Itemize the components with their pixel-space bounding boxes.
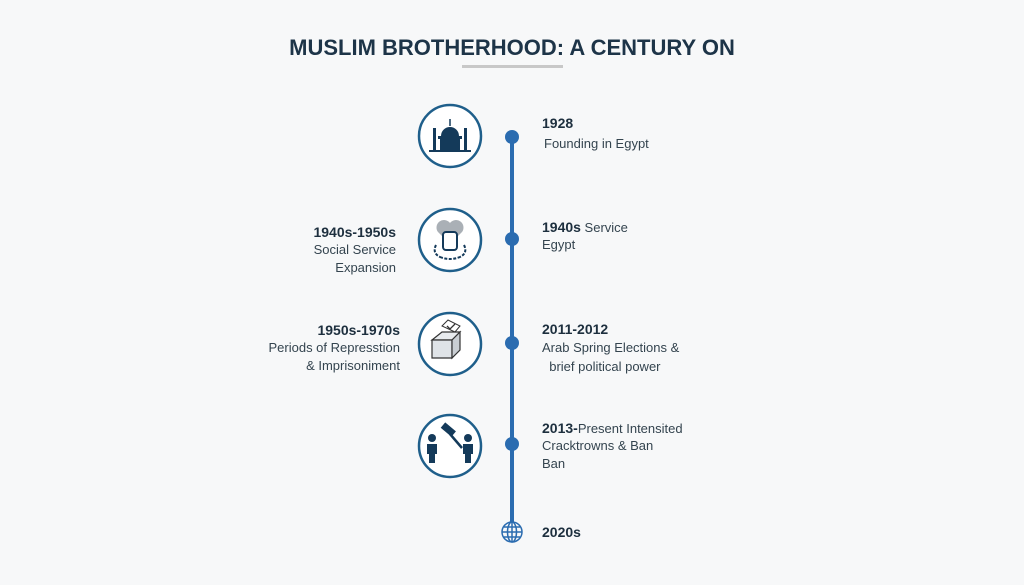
right text: 1928: 1928	[542, 115, 573, 131]
right text: 2011-2012: Arab Spring Elections &	[542, 340, 679, 355]
right text: 1928	[542, 115, 649, 151]
timeline axis	[505, 130, 519, 528]
left text: 1940s-1950s: Social Service	[314, 242, 396, 257]
icon: fist and heart	[419, 209, 481, 271]
left text: 1950s-1970s: Periods of Represstion	[268, 340, 400, 355]
right text: 1940s service: 1940s Service	[542, 219, 628, 235]
icon: mosque	[419, 105, 481, 167]
right text: 1928: Founding in Egypt	[544, 136, 649, 151]
right text: 2020s: 2020s	[542, 524, 581, 540]
left text: 1940s-1950s	[313, 224, 396, 275]
left text: 1950s-1970s: 1950s-1970s	[317, 322, 400, 338]
right text: 2013-present	[542, 420, 683, 471]
icon: gavel and figures	[419, 415, 481, 477]
right text: 1940s service	[542, 219, 628, 252]
right text: 2011-2012: brief political power	[549, 359, 660, 374]
icon: ballot box	[419, 313, 481, 375]
icon: globe	[502, 522, 522, 542]
left text: 1950s-1970s: & Imprisoniment	[306, 358, 400, 373]
right text: 2013-present: Cracktrowns & Ban	[542, 438, 653, 453]
right text: 1940s service: Egypt	[542, 237, 575, 252]
left text: 1950s-1970s	[268, 322, 400, 373]
left text: 1940s-1950s: Expansion	[335, 260, 396, 275]
right text: 2011-2012: 2011-2012	[542, 321, 608, 337]
left text: 1940s-1950s: 1940s-1950s	[313, 224, 396, 240]
right text: 2011-2012	[542, 321, 680, 374]
right text: 2013-present: Ban	[542, 456, 565, 471]
right text: 2013-present: 2013-Present Intensited	[542, 420, 683, 436]
title: MUSLIM BROTHERHOOD: A CENTURY ON	[289, 35, 735, 60]
